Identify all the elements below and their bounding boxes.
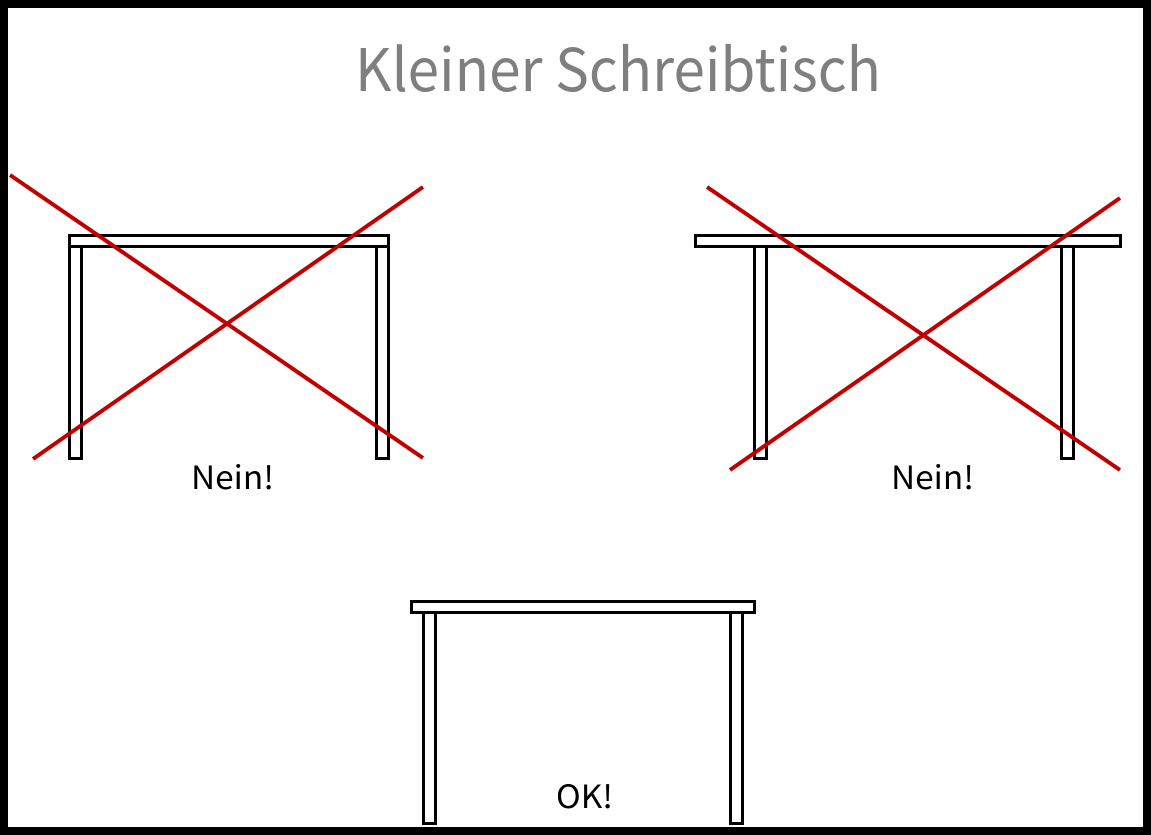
bottom table: correct small desk [412,602,754,824]
right table: overhanging top [696,236,1120,458]
left caption: Nein! [191,453,274,499]
left red cross [10,175,423,459]
right caption: Nein! [891,453,974,499]
title: Kleiner Schreibtisch [355,23,881,108]
bottom caption: OK! [556,772,613,818]
left table: legs flush with top [70,236,388,458]
right red cross [707,187,1120,470]
